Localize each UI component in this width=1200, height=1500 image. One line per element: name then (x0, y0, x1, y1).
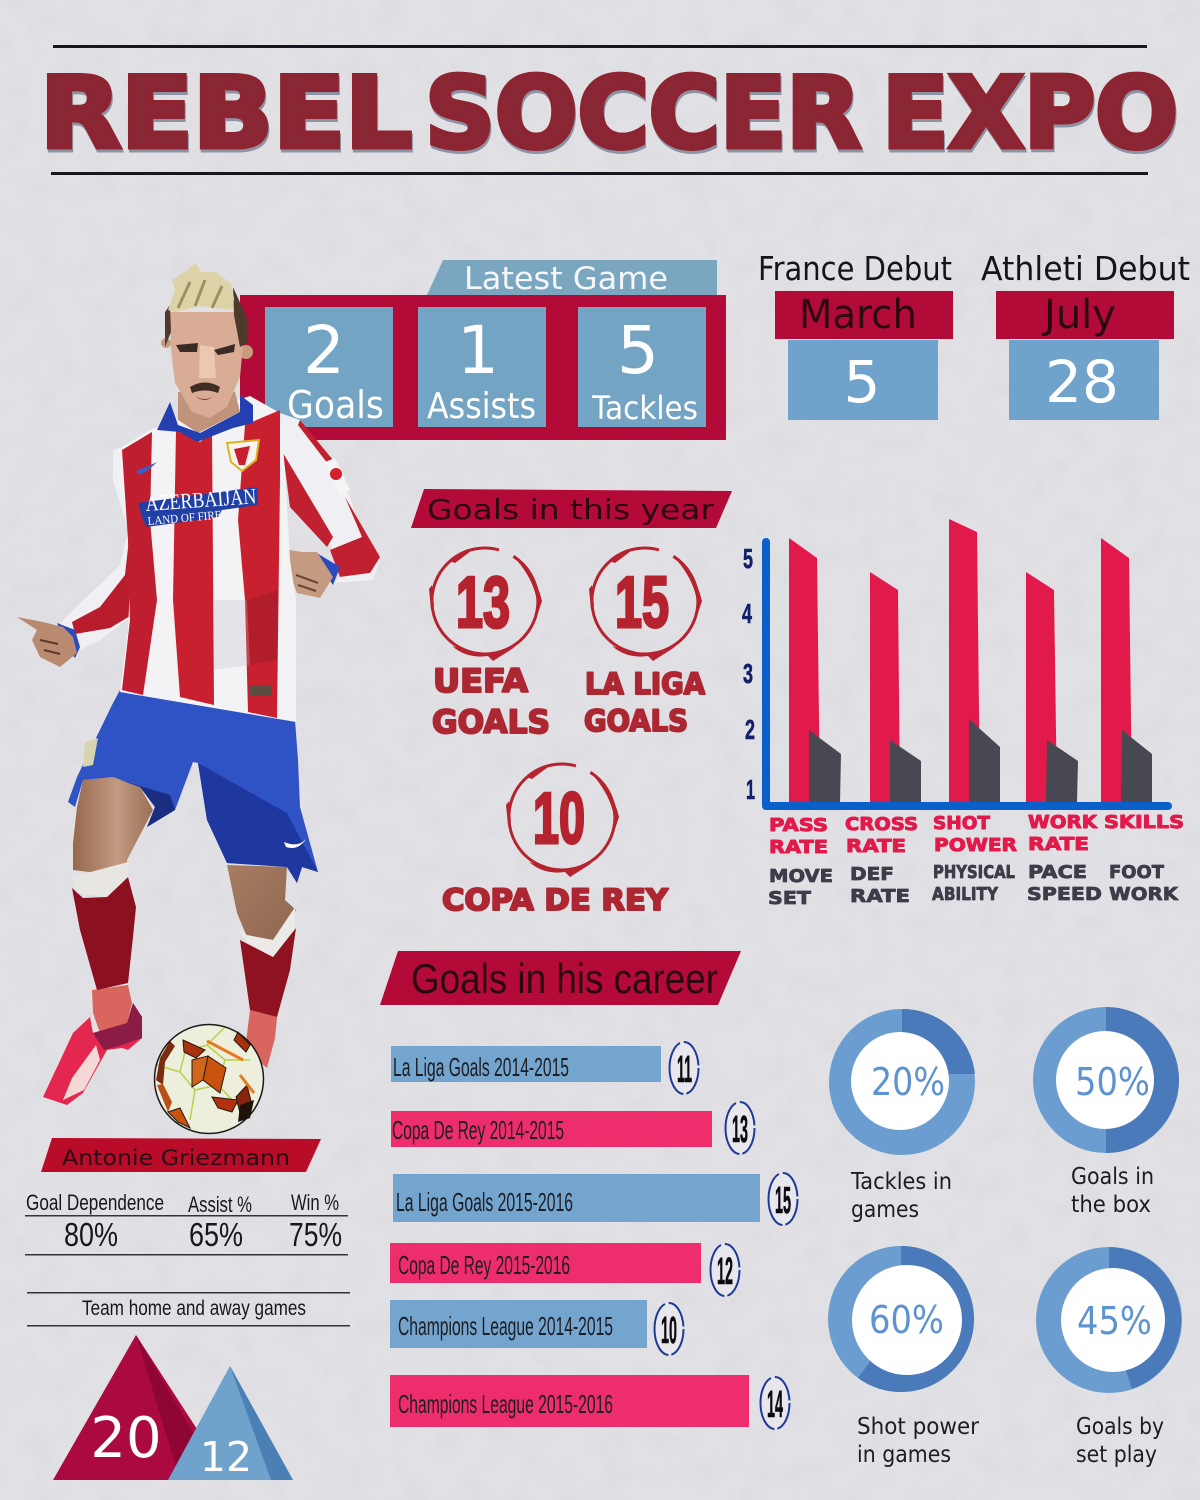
donut: goals in the box: Goals in (1071, 1164, 1154, 1190)
sponsor band: LAND OF FIRE (147, 508, 222, 528)
career bar: la liga 2015-2016: 15 (775, 1180, 791, 1222)
red axis labels: CROSS (845, 814, 918, 835)
title: SOCCER (425, 57, 861, 171)
career bar: champions league 2014-2015 (390, 1300, 684, 1355)
grey axis labels: DEF (850, 864, 894, 885)
red axis labels: RATE (1028, 834, 1089, 855)
back leg (227, 865, 296, 1068)
red axis labels (769, 812, 1184, 858)
career bar: la liga 2014-2015 (391, 1042, 698, 1094)
donut: goals in the box (1033, 1007, 1179, 1218)
career bar: champions league 2014-2015: Champions League 2014-2015 (398, 1311, 613, 1341)
y axis numbers (742, 543, 755, 805)
y axis numbers: 2 (745, 714, 755, 745)
title: REBEL (41, 60, 413, 174)
grey axis labels: SPEED (1027, 884, 1102, 905)
stat: 10 copa de rey: COPA DE REY (442, 883, 669, 917)
latest game heading: Latest Game (464, 261, 668, 297)
grey axis labels: FOOT (1109, 862, 1165, 883)
bottom rule (51, 172, 1148, 175)
stat: 15 la liga goals: 15 (615, 563, 669, 643)
player percentages: 80% (64, 1216, 118, 1253)
bars (789, 519, 1132, 803)
grey axis labels: SET (768, 888, 812, 909)
panel: france debut: France Debut (758, 249, 952, 288)
latest game heading (427, 260, 717, 297)
heading: goals in this year (411, 489, 732, 528)
career bar: la liga 2014-2015: 11 (677, 1049, 692, 1091)
stat: goals (265, 307, 393, 427)
ring 13 (429, 547, 542, 661)
ring 10 (506, 763, 619, 877)
career bar: la liga 2015-2016: La Liga Goals 2015-2016 (396, 1187, 573, 1217)
stat: assists (418, 307, 546, 427)
boot (43, 1003, 142, 1105)
grey axis labels: MOVE (769, 866, 833, 887)
grey axis labels: PACE (1028, 862, 1087, 883)
team home and away heading: Team home and away games (82, 1297, 306, 1320)
player percentages (25, 1190, 348, 1256)
title: REBEL (40, 57, 412, 171)
career bar: champions league 2015-2016: Champions League 2015-2016 (398, 1389, 613, 1419)
stat: goals: 2 (303, 312, 345, 389)
heading: goals in his career: Goals in his career (411, 955, 718, 1002)
illustration: player (17, 263, 380, 1134)
sponsor band: AZERBAIJAN (145, 483, 257, 516)
donut: shot power in games: 60% (869, 1298, 944, 1342)
panel: latest game (240, 260, 726, 440)
latest game background (240, 295, 726, 440)
player name banner: Antonie Griezmann (62, 1146, 290, 1170)
career bar: copa de rey 2015-2016: 12 (717, 1251, 733, 1293)
donut: tackles in games: Tackles in (850, 1169, 952, 1195)
stat: 15 la liga goals: GOALS (584, 704, 688, 738)
stat: tackles (578, 307, 706, 427)
front leg (72, 777, 153, 1033)
grey axis labels: PHYSICAL (933, 862, 1015, 883)
stat: 15 la liga goals (584, 547, 706, 738)
panel: athleti debut: 28 (1045, 348, 1119, 416)
stat: assists: Assists (427, 386, 536, 427)
career bar: la liga 2015-2016 (393, 1173, 798, 1225)
panel: athleti debut (981, 249, 1190, 420)
title: EXPO (883, 60, 1179, 174)
donut: shot power in games: in games (857, 1442, 951, 1468)
stat: 13 uefa goals: UEFA (433, 662, 528, 700)
stat: tackles: Tackles (591, 389, 698, 427)
neck (178, 392, 240, 433)
player percentages: Goal Dependence (26, 1190, 164, 1215)
y axis numbers: 1 (746, 774, 755, 805)
player percentages: Assist % (188, 1192, 252, 1217)
donut: goals in the box: the box (1071, 1192, 1151, 1218)
triangle: home games 20 (53, 1335, 230, 1480)
ball (154, 1024, 264, 1134)
y axis numbers: 3 (743, 658, 753, 689)
title (40, 57, 1179, 174)
donut: shot power in games (828, 1246, 980, 1468)
red axis labels: SKILLS (1104, 812, 1184, 833)
career bar: copa de rey 2015-2016: Copa De Rey 2015-2016 (398, 1250, 570, 1280)
red axis labels: POWER (934, 835, 1017, 856)
jersey (118, 396, 296, 722)
arm: right (278, 413, 380, 598)
panel: france debut: March (799, 292, 917, 338)
panel: athleti debut: Athleti Debut (981, 249, 1190, 288)
head (161, 287, 253, 418)
grey axis labels: WORK (1109, 884, 1179, 905)
panel: france debut: 5 (844, 348, 880, 416)
triangle: away games 12 (168, 1366, 293, 1481)
hair (168, 263, 234, 312)
sponsor band (138, 483, 258, 528)
title: EXPO (882, 57, 1178, 171)
grey axis labels: RATE (850, 886, 910, 907)
panel: athleti debut: July (1041, 292, 1116, 338)
stat: goals: Goals (287, 383, 384, 427)
shorts (68, 690, 318, 883)
donut: goals by set play (1036, 1247, 1182, 1468)
red axis labels: SHOT (933, 813, 991, 834)
stat: 10 copa de rey: 10 (533, 779, 585, 859)
career bar: copa de rey 2014-2015 (391, 1102, 754, 1154)
stat: 10 copa de rey (442, 763, 669, 917)
career bar: champions league 2015-2016 (390, 1375, 790, 1429)
bar chart: player ratings (742, 519, 1184, 909)
donut: tackles in games: 20% (871, 1060, 945, 1104)
career bar: copa de rey 2015-2016 (390, 1243, 740, 1296)
stat: 15 la liga goals: LA LIGA (585, 667, 706, 701)
triangle: away games 12: 12 (200, 1433, 252, 1481)
player name banner (41, 1138, 321, 1172)
donut: tackles in games: games (851, 1197, 919, 1223)
donut: goals in the box: 50% (1075, 1060, 1150, 1104)
grey axis labels: ABILITY (932, 884, 999, 905)
career bar: champions league 2014-2015: 10 (661, 1310, 677, 1352)
y axis numbers: 5 (743, 543, 753, 574)
axes (766, 542, 1168, 806)
career bar: copa de rey 2014-2015: Copa De Rey 2014-2015 (392, 1115, 564, 1145)
donut: tackles in games (829, 1009, 975, 1223)
triangle: home games 20: 20 (90, 1406, 162, 1471)
grey axis labels (768, 862, 1179, 909)
collar (157, 395, 253, 442)
donut: goals by set play: 45% (1077, 1299, 1152, 1343)
donut: goals by set play: Goals by (1076, 1414, 1164, 1440)
red axis labels: RATE (769, 837, 828, 858)
career bar: copa de rey 2014-2015: 13 (732, 1109, 748, 1151)
donut: shot power in games: Shot power (857, 1414, 980, 1440)
player percentages: Win % (291, 1190, 339, 1215)
red axis labels: WORK (1028, 812, 1098, 833)
panel: france debut (758, 249, 953, 420)
arm: left (17, 447, 145, 667)
stat: tackles: 5 (617, 312, 659, 389)
stat: 13 uefa goals (429, 547, 550, 741)
stat: 13 uefa goals: GOALS (432, 703, 550, 741)
stat: 13 uefa goals: 13 (456, 563, 510, 643)
red axis labels: PASS (769, 815, 828, 836)
heading: goals in this year: Goals in this year (427, 493, 715, 526)
crest (227, 440, 259, 471)
top rule (53, 45, 1147, 48)
donut: goals by set play: set play (1076, 1442, 1157, 1468)
ring 15 (589, 547, 702, 661)
y axis numbers: 4 (742, 598, 752, 629)
title: SOCCER (426, 60, 862, 174)
career bar: la liga 2014-2015: La Liga Goals 2014-2015 (393, 1052, 569, 1082)
player percentages: 75% (289, 1216, 342, 1253)
red axis labels: RATE (846, 836, 906, 857)
career bar: champions league 2015-2016: 14 (767, 1384, 783, 1426)
stat: assists: 1 (457, 312, 499, 389)
player percentages: 65% (189, 1216, 243, 1253)
sleeve logo (325, 458, 350, 497)
